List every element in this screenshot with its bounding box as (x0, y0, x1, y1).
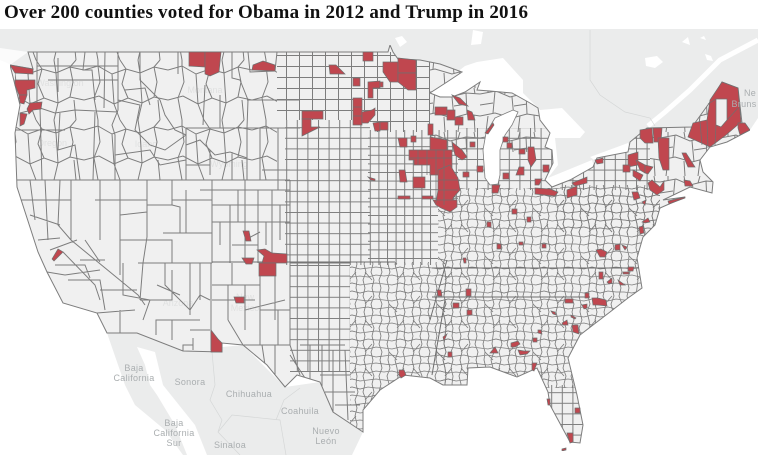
Mexico place labels: Bruns (731, 99, 757, 109)
Mexico place labels: Chihuahua (226, 389, 272, 399)
faint state names: Wyoming (210, 159, 248, 169)
faint state names (36, 78, 728, 313)
faint state names: Arizona (163, 298, 193, 308)
Mexico place labels: Sinaloa (214, 440, 246, 450)
lakes (425, 58, 632, 192)
Mexico place labels (113, 88, 757, 450)
Mexico place labels: Baja (124, 363, 144, 373)
Mexico place labels: Baja (164, 418, 184, 428)
title: Over 200 counties voted for Obama in 2012 and Trump in 2016 (4, 2, 528, 23)
Mexico place labels: Coahuila (281, 406, 319, 416)
Mexico place labels: León (315, 436, 337, 446)
Lake Michigan (483, 110, 518, 185)
highlighted counties: northern plains and northwest (10, 52, 416, 181)
faint state names: Maine (704, 110, 728, 120)
Mexico place labels: Sonora (175, 377, 205, 387)
faint state names: Montana (187, 85, 223, 95)
faint state names: Idaho (135, 139, 157, 149)
Mexico place labels: California (153, 428, 195, 438)
faint state names: Washington (36, 78, 84, 88)
Mexico place labels: Sur (167, 438, 181, 448)
faint state names: Oregon (37, 138, 67, 148)
Mexico place labels: Ne (744, 88, 756, 98)
county boundaries, Texas and south-central (290, 263, 360, 420)
highlighted counties: Southeast (399, 242, 634, 451)
faint state names: New (236, 292, 254, 302)
Mexico place labels: Nuevo (312, 426, 340, 436)
highlighted counties: Southwest and Colorado (52, 231, 287, 352)
highlighted counties: upper Midwest (398, 95, 494, 212)
Mexico place labels: California (113, 373, 155, 383)
county boundaries, western states (15, 52, 305, 387)
state line heavy horizontal and vertical guides (212, 260, 640, 375)
highlighted counties: Northeast (623, 82, 750, 234)
faint state names: Mexico (231, 303, 259, 313)
highlighted counties: Michigan and Ohio (487, 137, 603, 227)
